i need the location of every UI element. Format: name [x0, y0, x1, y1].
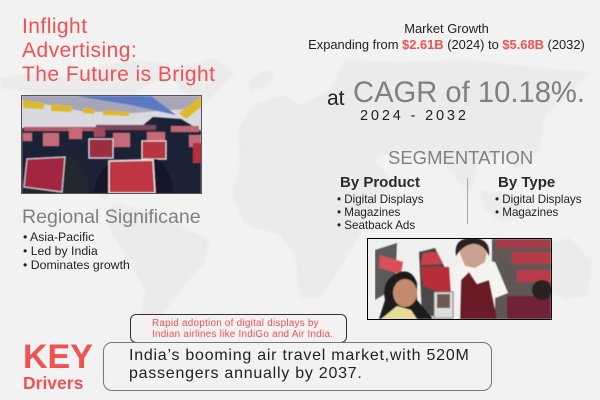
by product list: • Magazines: [337, 206, 400, 219]
by product list: • Seatback Ads: [337, 219, 415, 232]
callout text: [152, 318, 333, 340]
market growth text: [308, 21, 585, 52]
by product heading: By Product: [340, 174, 420, 191]
by type heading: By Type: [498, 174, 555, 191]
segment: by type: [495, 174, 582, 219]
CAGR headline: [327, 77, 585, 110]
market growth text: Market Growth: [404, 21, 489, 36]
drivers heading: Drivers: [23, 373, 83, 393]
regional list: • Led by India: [23, 244, 98, 258]
CAGR value: CAGR of 10.18%.: [353, 77, 585, 109]
by type list: • Magazines: [495, 206, 558, 219]
photo: aircraft cabin with seat ads: [21, 95, 202, 194]
key driver text: passengers annually by 2037.: [129, 365, 363, 382]
by product list: • Digital Displays: [337, 193, 424, 206]
by type list: [495, 193, 582, 219]
market growth text: Expanding from $2.61B (2024) to $5.68B (2032): [308, 36, 585, 52]
by type list: • Digital Displays: [495, 193, 582, 206]
key driver text: India’s booming air travel market,with 520M: [129, 347, 470, 364]
key heading: KEY: [23, 338, 93, 376]
segmentation heading: SEGMENTATION: [388, 147, 533, 168]
photo: flight attendant and passenger: [367, 238, 552, 320]
by product list: [337, 193, 424, 232]
regional list: • Dominates growth: [23, 258, 130, 272]
divider: [467, 178, 468, 224]
callout: digital displays: [130, 314, 347, 343]
regional list: • Asia-Pacific: [23, 230, 94, 244]
at label: at: [327, 87, 345, 110]
regional list: [23, 230, 130, 272]
callout text: Rapid adoption of digital displays by: [152, 318, 319, 329]
title: Inflight: [22, 15, 87, 38]
CAGR years: 2024 - 2032: [360, 108, 469, 124]
title: Advertising:: [22, 39, 137, 62]
callout text: Indian airlines like IndiGo and Air India.: [152, 329, 333, 340]
key driver box: [103, 342, 492, 391]
regional heading: Regional Significane: [22, 206, 201, 228]
title: [22, 15, 215, 86]
segment: by product: [337, 174, 424, 232]
key driver text: [129, 347, 470, 382]
title: The Future is Bright: [22, 63, 215, 86]
